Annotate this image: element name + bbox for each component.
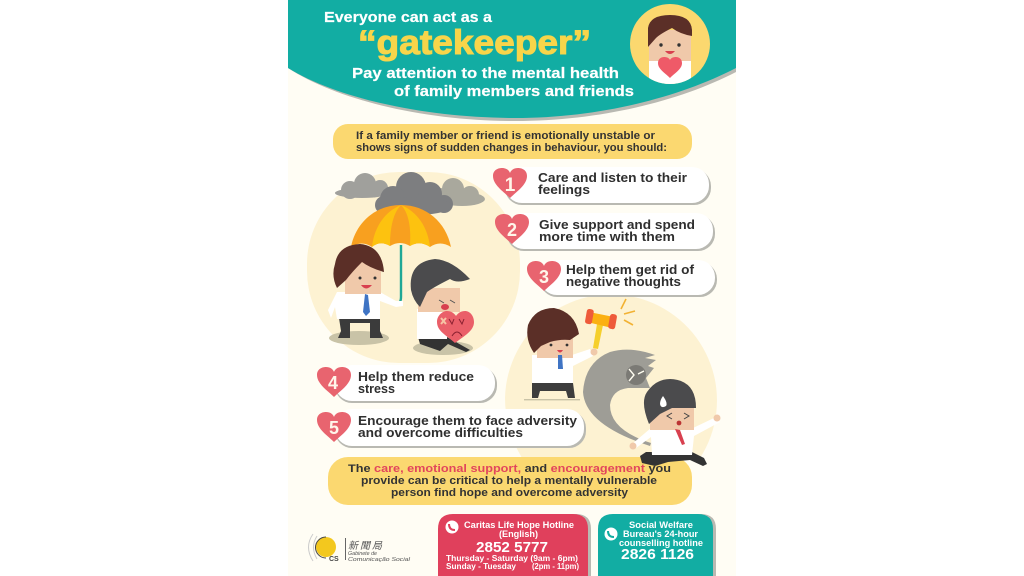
step 2: Give support and spend xyxy=(539,218,695,232)
panel: Caritas hotline: Thursday - Saturday (9am - 6pm) xyxy=(446,554,578,563)
step 2: more time with them xyxy=(539,230,675,244)
step 4: stress xyxy=(358,382,395,396)
step 1: Care and listen to their xyxy=(538,171,687,185)
figure: man with hammer xyxy=(524,308,598,400)
step 4: Help them reduce xyxy=(358,370,474,384)
icon: heart 5: 5 xyxy=(329,418,339,438)
figure: grey shadow monster xyxy=(583,350,656,446)
illustration: man hammering negative thoughts xyxy=(505,294,717,458)
icon: heart 1: 1 xyxy=(505,175,516,196)
step 3: negative thoughts xyxy=(566,275,681,289)
step 5: and overcome difficulties xyxy=(358,426,523,440)
step 2 xyxy=(495,213,715,251)
logo: government information bureau: Gabinete de xyxy=(348,551,377,557)
icon: heart 1 xyxy=(493,168,527,198)
subheading: Pay attention to the mental health xyxy=(352,65,619,82)
logo: government information bureau: 新聞局 xyxy=(348,540,383,552)
step 3: Help them get rid of xyxy=(566,263,695,277)
icon: phone xyxy=(604,528,618,540)
panel: Social Welfare Bureau hotline: Bureau's 24-hour xyxy=(623,529,698,539)
intro callout xyxy=(333,124,692,159)
icon: heart 4 xyxy=(317,367,351,397)
subheading: of family members and friends xyxy=(394,83,634,100)
icon: heart 4: 4 xyxy=(328,373,338,393)
heading: gatekeeper: “gatekeeper” xyxy=(358,24,591,62)
icon: gavel xyxy=(585,299,635,349)
conclusion callout: provide can be critical to help a mentally vulnerable xyxy=(361,475,657,487)
conclusion callout xyxy=(328,457,692,505)
icon: heart 3 xyxy=(527,261,561,291)
intro callout: If a family member or friend is emotionally unstable or xyxy=(356,130,656,142)
icon: storm clouds xyxy=(335,172,485,215)
icon: heart 5 xyxy=(317,412,351,442)
panel: Caritas hotline xyxy=(438,514,591,576)
conclusion callout: person find hope and overcome adversity xyxy=(391,487,629,499)
step 5 xyxy=(317,409,586,448)
intro callout: shows signs of sudden changes in behaviour, you should: xyxy=(356,142,667,154)
logo: government information bureau xyxy=(308,534,411,563)
logo: government information bureau: CS xyxy=(329,556,339,563)
figure: sad man holding broken heart xyxy=(411,259,474,355)
step 1: feelings xyxy=(538,183,590,197)
step 1 xyxy=(493,167,711,205)
figure: running man xyxy=(630,379,720,466)
icon: heart 2: 2 xyxy=(507,220,517,240)
panel: Caritas hotline: (English) xyxy=(499,529,538,539)
panel: Social Welfare Bureau hotline xyxy=(598,514,716,576)
heading: everyone can act: Everyone can act as a xyxy=(324,10,493,26)
panel: Caritas hotline: Sunday - Tuesday xyxy=(446,562,517,571)
logo: government information bureau: Comunicação Social xyxy=(348,557,411,563)
panel: Caritas hotline: 2852 5777 xyxy=(476,539,548,556)
icon: phone xyxy=(446,520,458,534)
icon: umbrella xyxy=(351,205,451,304)
conclusion callout: The care, emotional support, and encouragement you xyxy=(348,463,671,475)
panel: Social Welfare Bureau hotline: Social Welfare xyxy=(629,520,693,530)
icon: heart 2 xyxy=(495,214,529,244)
step 4 xyxy=(317,365,497,403)
figure: smiling man xyxy=(328,244,403,345)
panel: Caritas hotline: Caritas Life Hope Hotline xyxy=(464,520,574,530)
icon: person holding heart xyxy=(630,4,710,86)
step 5: Encourage them to face adversity xyxy=(358,414,577,428)
icon: heart 3: 3 xyxy=(539,267,549,287)
subheading xyxy=(352,65,634,100)
step 3 xyxy=(527,260,717,297)
panel: Caritas hotline: (2pm - 11pm) xyxy=(532,562,579,571)
panel: Social Welfare Bureau hotline: 2826 1126 xyxy=(621,546,694,563)
header banner xyxy=(288,0,736,121)
illustration: man sheltering friend under umbrella xyxy=(307,172,520,363)
panel: Social Welfare Bureau hotline: counselling hotline xyxy=(619,538,703,548)
